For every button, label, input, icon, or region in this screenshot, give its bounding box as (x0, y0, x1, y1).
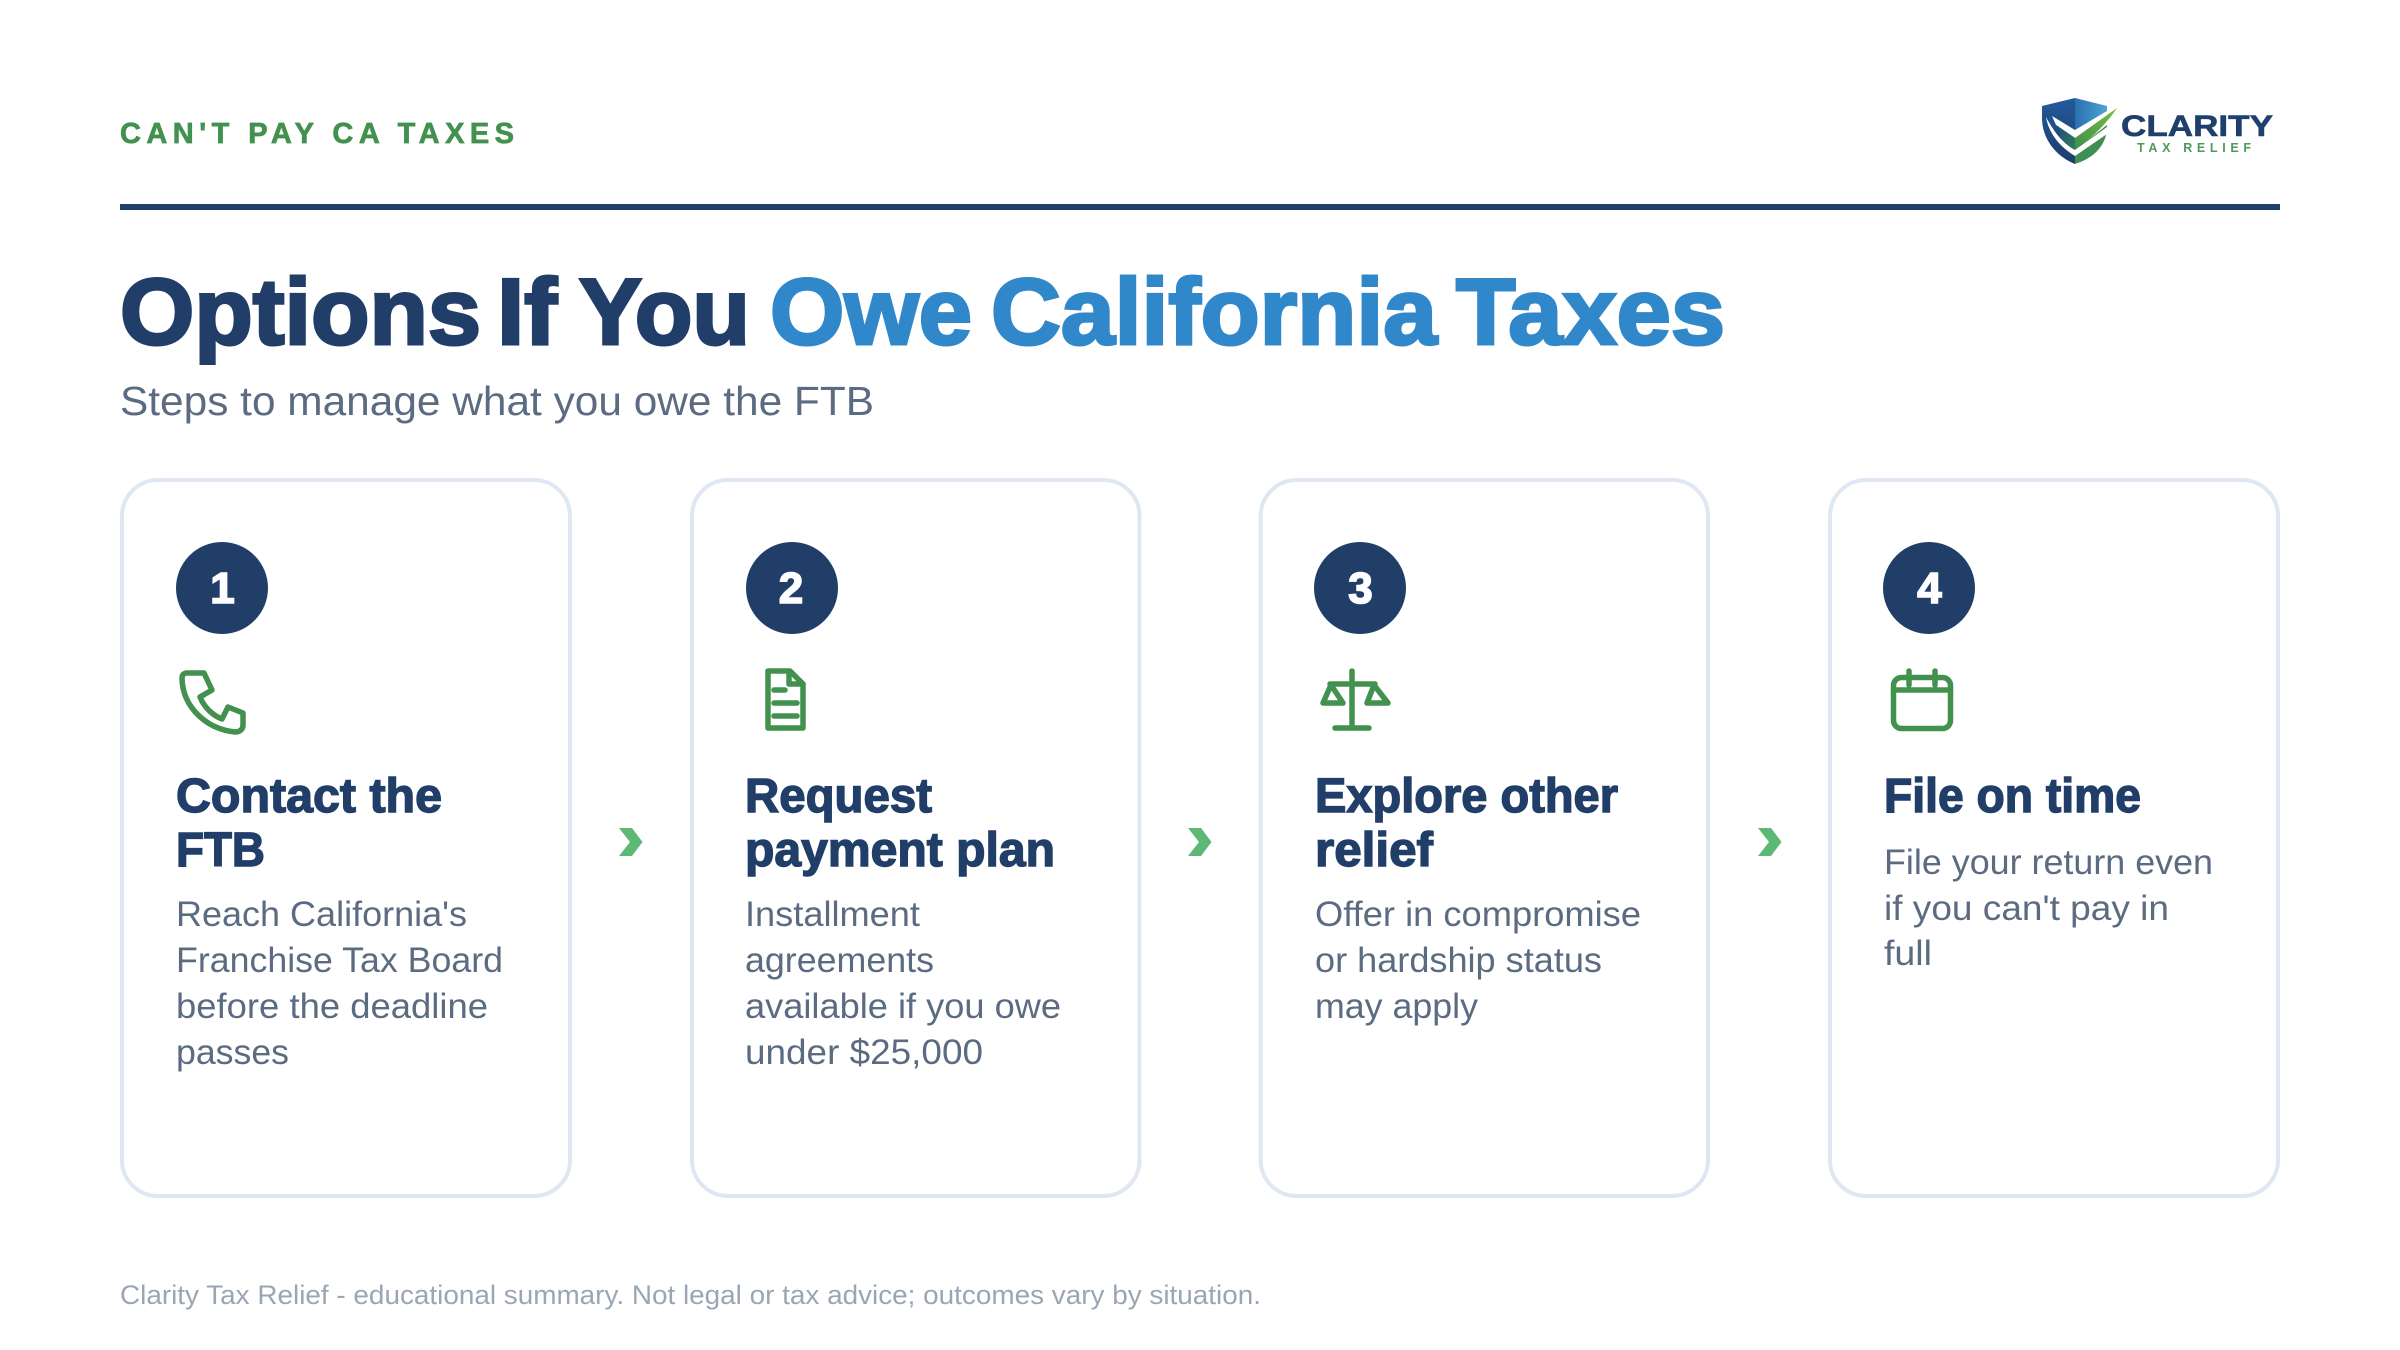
title (120, 259, 1725, 364)
step number 4: 4 (1917, 564, 1942, 613)
step number 2 (746, 542, 838, 634)
panel: step 4 file on time (1830, 480, 2278, 1196)
step number 3 (1314, 542, 1406, 634)
logo tagline: TAX RELIEF (2137, 141, 2251, 155)
heading: payment plan (745, 824, 1055, 877)
logo: Clarity Tax Relief (2042, 98, 2273, 164)
heading: relief (1315, 824, 1434, 877)
description: passes (176, 1033, 289, 1072)
card outline (692, 480, 1140, 1196)
step number 4 (1883, 542, 1975, 634)
heading (745, 770, 1055, 877)
description: if you can't pay in (1884, 889, 2169, 928)
description (1315, 895, 1641, 1026)
arrow 3 (1758, 828, 1782, 856)
title: If (497, 259, 558, 364)
arrow 2 (1188, 828, 1212, 856)
panel: step 1 contact the FTB (122, 480, 570, 1196)
card outline (1830, 480, 2278, 1196)
header rule (120, 204, 2280, 210)
heading: FTB (176, 824, 265, 877)
description: may apply (1315, 987, 1478, 1026)
description (176, 895, 503, 1072)
logo shield (2042, 98, 2117, 164)
description: Offer in compromise (1315, 895, 1641, 934)
icon: document (768, 671, 803, 728)
heading: File on time (1884, 770, 2141, 823)
footer disclaimer: Clarity Tax Relief - educational summary. Not legal or tax advice; outcomes vary by situation. (120, 1280, 1261, 1310)
description: full (1884, 934, 1932, 973)
description (1884, 843, 2213, 973)
title highlight: California (991, 259, 1438, 364)
description: or hardship status (1315, 941, 1602, 980)
panel: step 2 request payment plan (692, 480, 1140, 1196)
subtitle: Steps to manage what you owe the FTB (120, 378, 874, 424)
card outline (122, 480, 570, 1196)
description: under $25,000 (745, 1033, 983, 1072)
icon: scales (1323, 671, 1388, 728)
description: available if you owe (745, 987, 1061, 1026)
title: Options (120, 259, 481, 364)
description: agreements (745, 941, 934, 980)
heading (176, 770, 442, 877)
icon: calendar (1894, 671, 1950, 728)
title highlight: Taxes (1456, 259, 1725, 364)
heading: Request (745, 770, 932, 823)
step number 3: 3 (1348, 564, 1373, 613)
icon: phone (182, 673, 243, 732)
description: File your return even (1884, 843, 2213, 882)
heading (1315, 770, 1618, 877)
arrow 1 (619, 828, 642, 856)
step number 1: 1 (210, 564, 235, 613)
eyebrow label: CAN'T PAY CA TAXES (120, 118, 514, 150)
description: before the deadline (176, 987, 488, 1026)
title highlight: Owe (770, 259, 972, 364)
step number 1 (176, 542, 268, 634)
description: Reach California's (176, 895, 467, 934)
description (745, 895, 1061, 1072)
heading: Contact the (176, 770, 442, 823)
description: Franchise Tax Board (176, 941, 503, 980)
title highlight (770, 259, 1725, 364)
card outline (1261, 480, 1708, 1196)
panel: step 3 explore other relief (1261, 480, 1708, 1196)
title: You (579, 259, 750, 364)
logo wordmark: CLARITY (2121, 110, 2273, 143)
step number 2: 2 (779, 564, 803, 613)
heading: Explore other (1315, 770, 1618, 823)
description: Installment (745, 895, 920, 934)
